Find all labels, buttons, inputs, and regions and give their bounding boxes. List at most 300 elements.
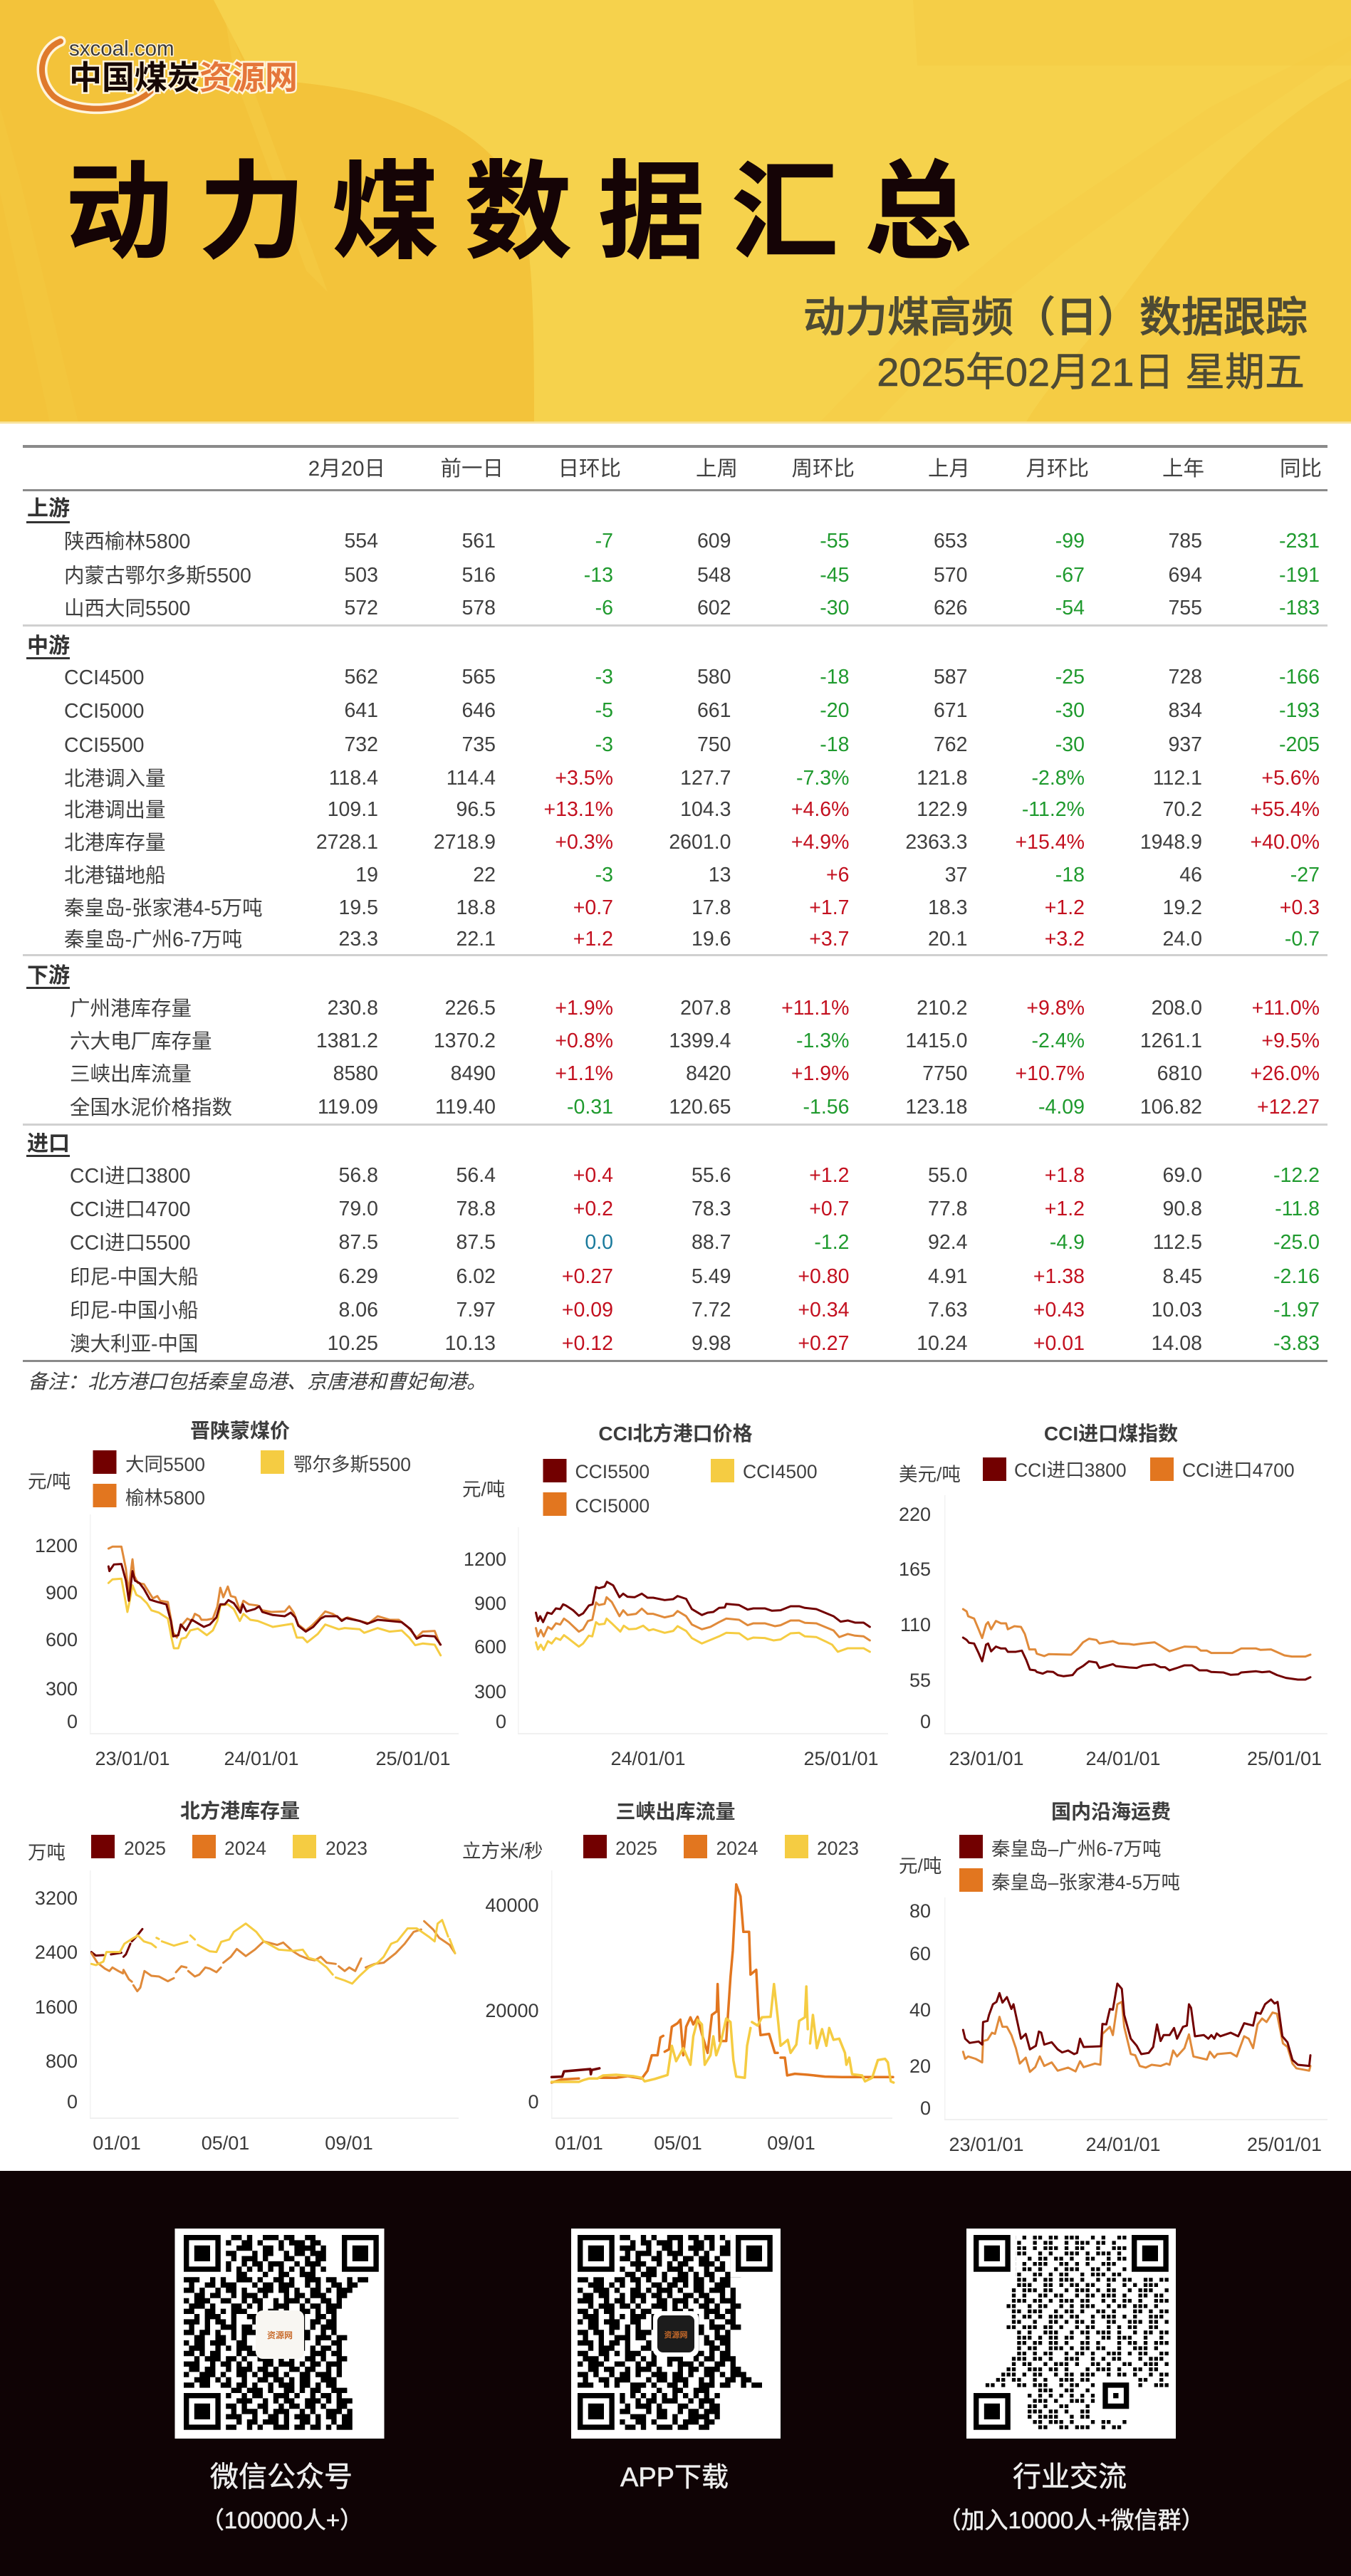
row: 120.65 [669, 1096, 731, 1119]
row: 755 [1168, 597, 1202, 619]
row: 北港锚地船 [64, 864, 166, 887]
row: 秦皇岛-广州6-7万吨 [64, 928, 242, 951]
row [64, 864, 1320, 887]
y axis labels: 80 [909, 1900, 931, 1922]
row: -30 [820, 597, 849, 619]
row: 561 [461, 530, 496, 553]
x axis labels: 25/01/01 [803, 1748, 879, 1769]
row: 109.1 [328, 798, 378, 821]
row [64, 597, 1320, 620]
row: 694 [1168, 564, 1202, 587]
table header: 上年 [1162, 457, 1204, 481]
line series [963, 1609, 1310, 1680]
data table [23, 445, 1327, 1362]
row [64, 733, 1320, 757]
row: 22.1 [457, 928, 496, 951]
row: 广州港库存量 [70, 998, 192, 1020]
row: +1.9% [555, 997, 613, 1020]
row: 0.0 [585, 1231, 613, 1254]
x axis labels: 23/01/01 [949, 1748, 1024, 1769]
row: -2.16 [1273, 1265, 1320, 1288]
logo: sxcoal [42, 37, 298, 109]
legend: 2024 [716, 1838, 758, 1859]
row: 内蒙古鄂尔多斯5500 [64, 565, 251, 587]
row: +0.12 [562, 1332, 613, 1355]
label: 行业交流: （加入10000人+微信群） [937, 2507, 1205, 2533]
row: 104.3 [680, 798, 731, 821]
row: 88.7 [692, 1231, 731, 1254]
row: 全国水泥价格指数 [70, 1096, 232, 1119]
row: -3 [595, 864, 613, 886]
row: -5 [595, 699, 613, 722]
row: +4.6% [791, 798, 849, 821]
row: 572 [344, 597, 378, 619]
row: -1.97 [1273, 1299, 1320, 1321]
row: -1.2 [814, 1231, 849, 1254]
row: +15.4% [1016, 831, 1085, 854]
x axis labels [949, 2134, 1322, 2155]
legend: 2023 [817, 1838, 859, 1859]
row: -25.0 [1273, 1231, 1320, 1254]
row: CCI5000 [64, 700, 144, 723]
row: 587 [934, 666, 967, 688]
row: +1.7 [809, 896, 849, 919]
x axis labels: 05/01 [202, 2132, 249, 2154]
table header: 同比 [1280, 457, 1322, 481]
row: 78.3 [692, 1198, 731, 1220]
row: +0.7 [573, 896, 613, 919]
row: +0.34 [798, 1299, 850, 1321]
row [64, 564, 1320, 587]
row: 19 [355, 864, 378, 886]
row: -25 [1055, 666, 1085, 688]
row: 580 [697, 666, 731, 688]
row: 112.5 [1153, 1231, 1202, 1254]
label: 微信公众号 [201, 2461, 363, 2533]
row: +6 [826, 864, 849, 886]
chart title: 国内沿海运费 [1051, 1801, 1171, 1823]
unit: 元/吨 [462, 1479, 505, 1500]
y axis labels [35, 1535, 78, 1732]
row: 565 [461, 666, 496, 688]
unit: 元/吨 [28, 1471, 71, 1492]
row: 735 [461, 733, 496, 756]
legend: 秦皇岛–张家港4-5万吨 [991, 1872, 1180, 1893]
row: 226.5 [445, 997, 496, 1020]
legend [91, 1835, 367, 1859]
chart: 北方港库存量 [28, 1800, 459, 2154]
table header: 周环比 [791, 457, 855, 481]
row: 671 [934, 699, 967, 722]
y axis labels: 0 [496, 1711, 506, 1732]
row: 90.8 [1163, 1198, 1202, 1220]
row: +1.2 [809, 1164, 849, 1187]
row: +1.38 [1033, 1265, 1085, 1288]
row: 1399.4 [669, 1030, 731, 1052]
row: 230.8 [328, 997, 378, 1020]
x axis labels [949, 1748, 1322, 1769]
row: +13.1% [544, 798, 613, 821]
row [64, 530, 1320, 553]
row: 2601.0 [669, 831, 731, 854]
row: 732 [344, 733, 378, 756]
row: 554 [344, 530, 378, 553]
legend: CCI5000 [575, 1495, 650, 1517]
y axis labels: 1600 [35, 1996, 78, 2018]
chart: CCI北方港口价格 [462, 1423, 888, 1769]
section: 下游: 下游 [27, 964, 70, 988]
row: +0.27 [562, 1265, 613, 1288]
row [70, 1299, 1320, 1322]
row: 6.02 [457, 1265, 496, 1288]
x axis labels: 05/01 [654, 2132, 702, 2154]
row: 秦皇岛-张家港4-5万吨 [64, 897, 263, 920]
row: 119.40 [435, 1096, 496, 1119]
chart title: 北方港库存量 [180, 1800, 300, 1822]
row: 19.6 [692, 928, 731, 951]
legend: 2025 [615, 1838, 657, 1859]
row: 6.29 [339, 1265, 378, 1288]
row: 北港库存量 [64, 832, 166, 854]
row: 79.0 [339, 1198, 378, 1220]
row: 10.13 [445, 1332, 496, 1355]
row: CCI进口4700 [70, 1198, 190, 1221]
row: -1.3% [796, 1030, 849, 1052]
line series [108, 1546, 441, 1655]
row [70, 1030, 1320, 1053]
row [64, 699, 1320, 723]
chart title: CCI北方港口价格 [598, 1423, 753, 1445]
row: -183 [1279, 597, 1320, 619]
row: +1.9% [791, 1062, 849, 1085]
legend [583, 1835, 859, 1859]
row: -67 [1055, 564, 1085, 587]
row: 785 [1168, 530, 1202, 553]
row: -0.7 [1285, 928, 1320, 951]
row: 24.0 [1163, 928, 1202, 951]
row: +12.27 [1257, 1096, 1320, 1119]
row: 87.5 [339, 1231, 378, 1254]
row: +3.2 [1045, 928, 1085, 951]
legend [983, 1457, 1295, 1481]
row: -12.2 [1273, 1164, 1320, 1187]
row: 516 [461, 564, 496, 587]
y axis labels: 0 [67, 2091, 78, 2112]
row: -45 [820, 564, 849, 587]
row: 10.25 [328, 1332, 378, 1355]
x axis labels: 24/01/01 [610, 1748, 686, 1769]
row: 106.82 [1140, 1096, 1202, 1119]
row: 10.03 [1152, 1299, 1202, 1321]
row: +55.4% [1251, 798, 1320, 821]
row: 印尼-中国小船 [70, 1299, 198, 1322]
row: -4.9 [1050, 1231, 1085, 1254]
row: -99 [1055, 530, 1085, 553]
row: 8.06 [339, 1299, 378, 1321]
row [70, 1062, 1320, 1086]
row: 北港调入量 [64, 768, 166, 790]
x axis labels: 25/01/01 [375, 1748, 451, 1769]
row [64, 798, 1320, 822]
table header: 月环比 [1026, 457, 1089, 481]
row: -2.4% [1032, 1030, 1085, 1052]
row: 山西大同5500 [64, 597, 190, 620]
y axis labels: 600 [46, 1629, 78, 1650]
section: 中游: 中游 [27, 634, 70, 658]
row: 23.3 [339, 928, 378, 951]
row: 56.8 [339, 1164, 378, 1187]
row: -18 [820, 733, 849, 756]
row: +0.43 [1033, 1299, 1085, 1321]
row: +0.09 [562, 1299, 613, 1321]
row: +11.0% [1252, 997, 1320, 1020]
row: 937 [1168, 733, 1202, 756]
row: +0.3% [555, 831, 613, 854]
legend: 榆林5800 [125, 1487, 205, 1509]
label: 行业交流 [937, 2461, 1205, 2533]
row: 123.18 [905, 1096, 967, 1119]
row [70, 997, 1320, 1020]
row: +9.8% [1026, 997, 1085, 1020]
row: -4.09 [1038, 1096, 1085, 1119]
y axis labels: 60 [909, 1943, 931, 1964]
row [64, 666, 1320, 689]
row [70, 1198, 1320, 1221]
row: -11.8 [1275, 1198, 1320, 1220]
legend: 2025 [124, 1838, 166, 1859]
legend: 秦皇岛–广州6-7万吨 [991, 1838, 1162, 1860]
date: 2025年02月21日 星期五 [877, 350, 1305, 394]
row: -30 [1055, 733, 1085, 756]
y axis labels [35, 1888, 78, 2112]
row: 69.0 [1163, 1164, 1202, 1187]
row: CCI5500 [64, 734, 144, 757]
y axis labels: 20000 [485, 2000, 538, 2021]
y axis labels: 600 [474, 1636, 506, 1658]
logo: sxcoal: sxcoal.com [69, 37, 174, 61]
x axis labels: 23/01/01 [949, 2134, 1024, 2155]
row: 陕西榆林5800 [64, 530, 190, 553]
row: 印尼-中国大船 [70, 1266, 198, 1289]
label: APP下载: APP下载 [620, 2463, 729, 2493]
line series [91, 1920, 455, 1991]
row: 92.4 [928, 1231, 968, 1254]
chart: CCI进口煤指数 [899, 1423, 1327, 1769]
row: +40.0% [1251, 831, 1320, 854]
legend: CCI4500 [743, 1461, 818, 1482]
row: 20.1 [928, 928, 967, 951]
unit: 立方米/秒 [462, 1841, 543, 1862]
row: 17.8 [692, 896, 731, 919]
x axis labels: 01/01 [555, 2132, 603, 2154]
y axis labels: 220 [899, 1504, 931, 1525]
row: +0.3 [1280, 896, 1320, 919]
row: +0.7 [809, 1198, 849, 1220]
row: +0.01 [1033, 1332, 1085, 1355]
x axis labels: 24/01/01 [224, 1748, 299, 1769]
y axis labels: 20 [909, 2056, 931, 2077]
row: +0.8% [555, 1030, 613, 1052]
legend: CCI进口3800 [1014, 1460, 1127, 1481]
row: 118.4 [329, 767, 378, 790]
row: 77.8 [928, 1198, 967, 1220]
row: +4.9% [791, 831, 849, 854]
row: -2.8% [1032, 767, 1085, 790]
row: 56.4 [457, 1164, 496, 1187]
legend: CCI进口4700 [1182, 1460, 1295, 1481]
row: 834 [1168, 699, 1202, 722]
row: 8420 [686, 1062, 731, 1085]
row [70, 1265, 1320, 1289]
y axis labels: 0 [920, 2098, 931, 2119]
row [70, 1231, 1320, 1255]
row: +10.7% [1016, 1062, 1085, 1085]
row: +0.80 [798, 1265, 849, 1288]
QR code: APP下载 [571, 2229, 781, 2439]
x axis labels: 25/01/01 [1247, 2134, 1322, 2155]
y axis labels: 0 [920, 1711, 931, 1732]
legend [543, 1459, 818, 1517]
logo: sxcoal: 资源网 [199, 59, 298, 96]
table header: 2月20日 [308, 457, 385, 481]
row: 18.3 [928, 896, 967, 919]
chart title: 晋陕蒙煤价 [190, 1420, 290, 1442]
row: 5.49 [692, 1265, 731, 1288]
footer panel [0, 2171, 1351, 2576]
label: 微信公众号: 微信公众号 [210, 2461, 353, 2493]
row: 208.0 [1152, 997, 1202, 1020]
y axis labels: 3200 [35, 1888, 78, 1909]
y axis labels [485, 1895, 538, 2112]
row: -191 [1279, 564, 1320, 587]
row: 641 [344, 699, 378, 722]
row: 8.45 [1163, 1265, 1202, 1288]
row: 127.7 [680, 767, 731, 790]
chart title: CCI进口煤指数 [1044, 1423, 1178, 1445]
row: -7 [595, 530, 613, 553]
row: 503 [344, 564, 378, 587]
row [64, 767, 1320, 790]
QR code: APP下载: 资源网 [664, 2330, 688, 2340]
row [64, 896, 1320, 920]
row: 北港调出量 [64, 799, 166, 822]
row: 210.2 [917, 997, 967, 1020]
x axis labels [610, 1748, 879, 1769]
row: -30 [1055, 699, 1085, 722]
row: 578 [461, 597, 496, 619]
row: 653 [934, 530, 967, 553]
legend: 2023 [325, 1838, 367, 1859]
row: 78.8 [457, 1198, 496, 1220]
row: 46 [1179, 864, 1202, 886]
row: -20 [820, 699, 849, 722]
row: 8580 [333, 1062, 378, 1085]
table header [308, 457, 1322, 481]
QR code: 微信公众号: 资源网 [267, 2330, 293, 2340]
row: +11.1% [781, 997, 849, 1020]
row: 1261.1 [1140, 1030, 1202, 1052]
QR code: 微信公众号 [175, 2229, 385, 2439]
chart: 三峡出库流量 [462, 1801, 894, 2154]
row: -54 [1055, 597, 1085, 619]
row: -0.31 [567, 1096, 613, 1119]
section: 上游: 上游 [27, 497, 70, 520]
line series [963, 1984, 1310, 2072]
row: 10.24 [917, 1332, 968, 1355]
row: +1.2 [573, 928, 613, 951]
row: 7750 [922, 1062, 967, 1085]
row: 602 [697, 597, 731, 619]
row: 728 [1168, 666, 1202, 688]
x axis labels [95, 1748, 451, 1769]
unit: 万吨 [28, 1842, 66, 1863]
row: +1.2 [1045, 1198, 1085, 1220]
row: +3.7 [809, 928, 849, 951]
y axis labels: 1200 [464, 1549, 506, 1570]
y axis labels [899, 1504, 931, 1732]
chart title: 三峡出库流量 [615, 1801, 736, 1823]
row: 207.8 [680, 997, 731, 1020]
legend: CCI5500 [575, 1461, 650, 1482]
row: CCI进口5500 [70, 1232, 190, 1255]
table header: 上周 [696, 457, 738, 481]
row: 19.2 [1163, 896, 1202, 919]
x axis labels: 24/01/01 [1085, 1748, 1161, 1769]
row: 112.1 [1153, 767, 1202, 790]
row [64, 831, 1320, 854]
row: 114.4 [447, 767, 496, 790]
x axis labels: 09/01 [767, 2132, 815, 2154]
row: 18.8 [457, 896, 496, 919]
y axis labels: 110 [900, 1614, 931, 1635]
logo: sxcoal: 中国煤炭 [69, 59, 200, 96]
row: 55.6 [692, 1164, 731, 1187]
x axis labels: 23/01/01 [95, 1748, 170, 1769]
row: 14.08 [1152, 1332, 1202, 1355]
line series [536, 1582, 870, 1652]
unit: 元/吨 [899, 1855, 941, 1877]
unit: 美元/吨 [899, 1464, 961, 1485]
row: +9.5% [1261, 1030, 1320, 1052]
row: +0.4 [573, 1164, 613, 1187]
row: -27 [1290, 864, 1320, 886]
legend: 2024 [224, 1838, 266, 1859]
row: 19.5 [339, 896, 378, 919]
row: -11.2% [1022, 798, 1085, 821]
row: -193 [1279, 699, 1320, 722]
row: +26.0% [1251, 1062, 1320, 1085]
row: -231 [1279, 530, 1320, 553]
row: -205 [1279, 733, 1320, 756]
row: 2718.9 [434, 831, 496, 854]
row [70, 1332, 1320, 1356]
row: 661 [697, 699, 731, 722]
y axis labels [909, 1900, 931, 2119]
row: 70.2 [1163, 798, 1202, 821]
row: 2728.1 [316, 831, 378, 854]
table header: 前一日 [440, 457, 504, 481]
chart: 晋陕蒙煤价 [28, 1420, 459, 1769]
row: 三峡出库流量 [70, 1063, 192, 1086]
section: 进口: 进口 [27, 1132, 70, 1156]
y axis labels: 165 [899, 1559, 931, 1580]
y axis labels: 800 [46, 2051, 78, 2072]
row: -3 [595, 666, 613, 688]
row: 548 [697, 564, 731, 587]
row: -18 [1055, 864, 1085, 886]
legend [93, 1450, 411, 1509]
row: 87.5 [457, 1231, 496, 1254]
